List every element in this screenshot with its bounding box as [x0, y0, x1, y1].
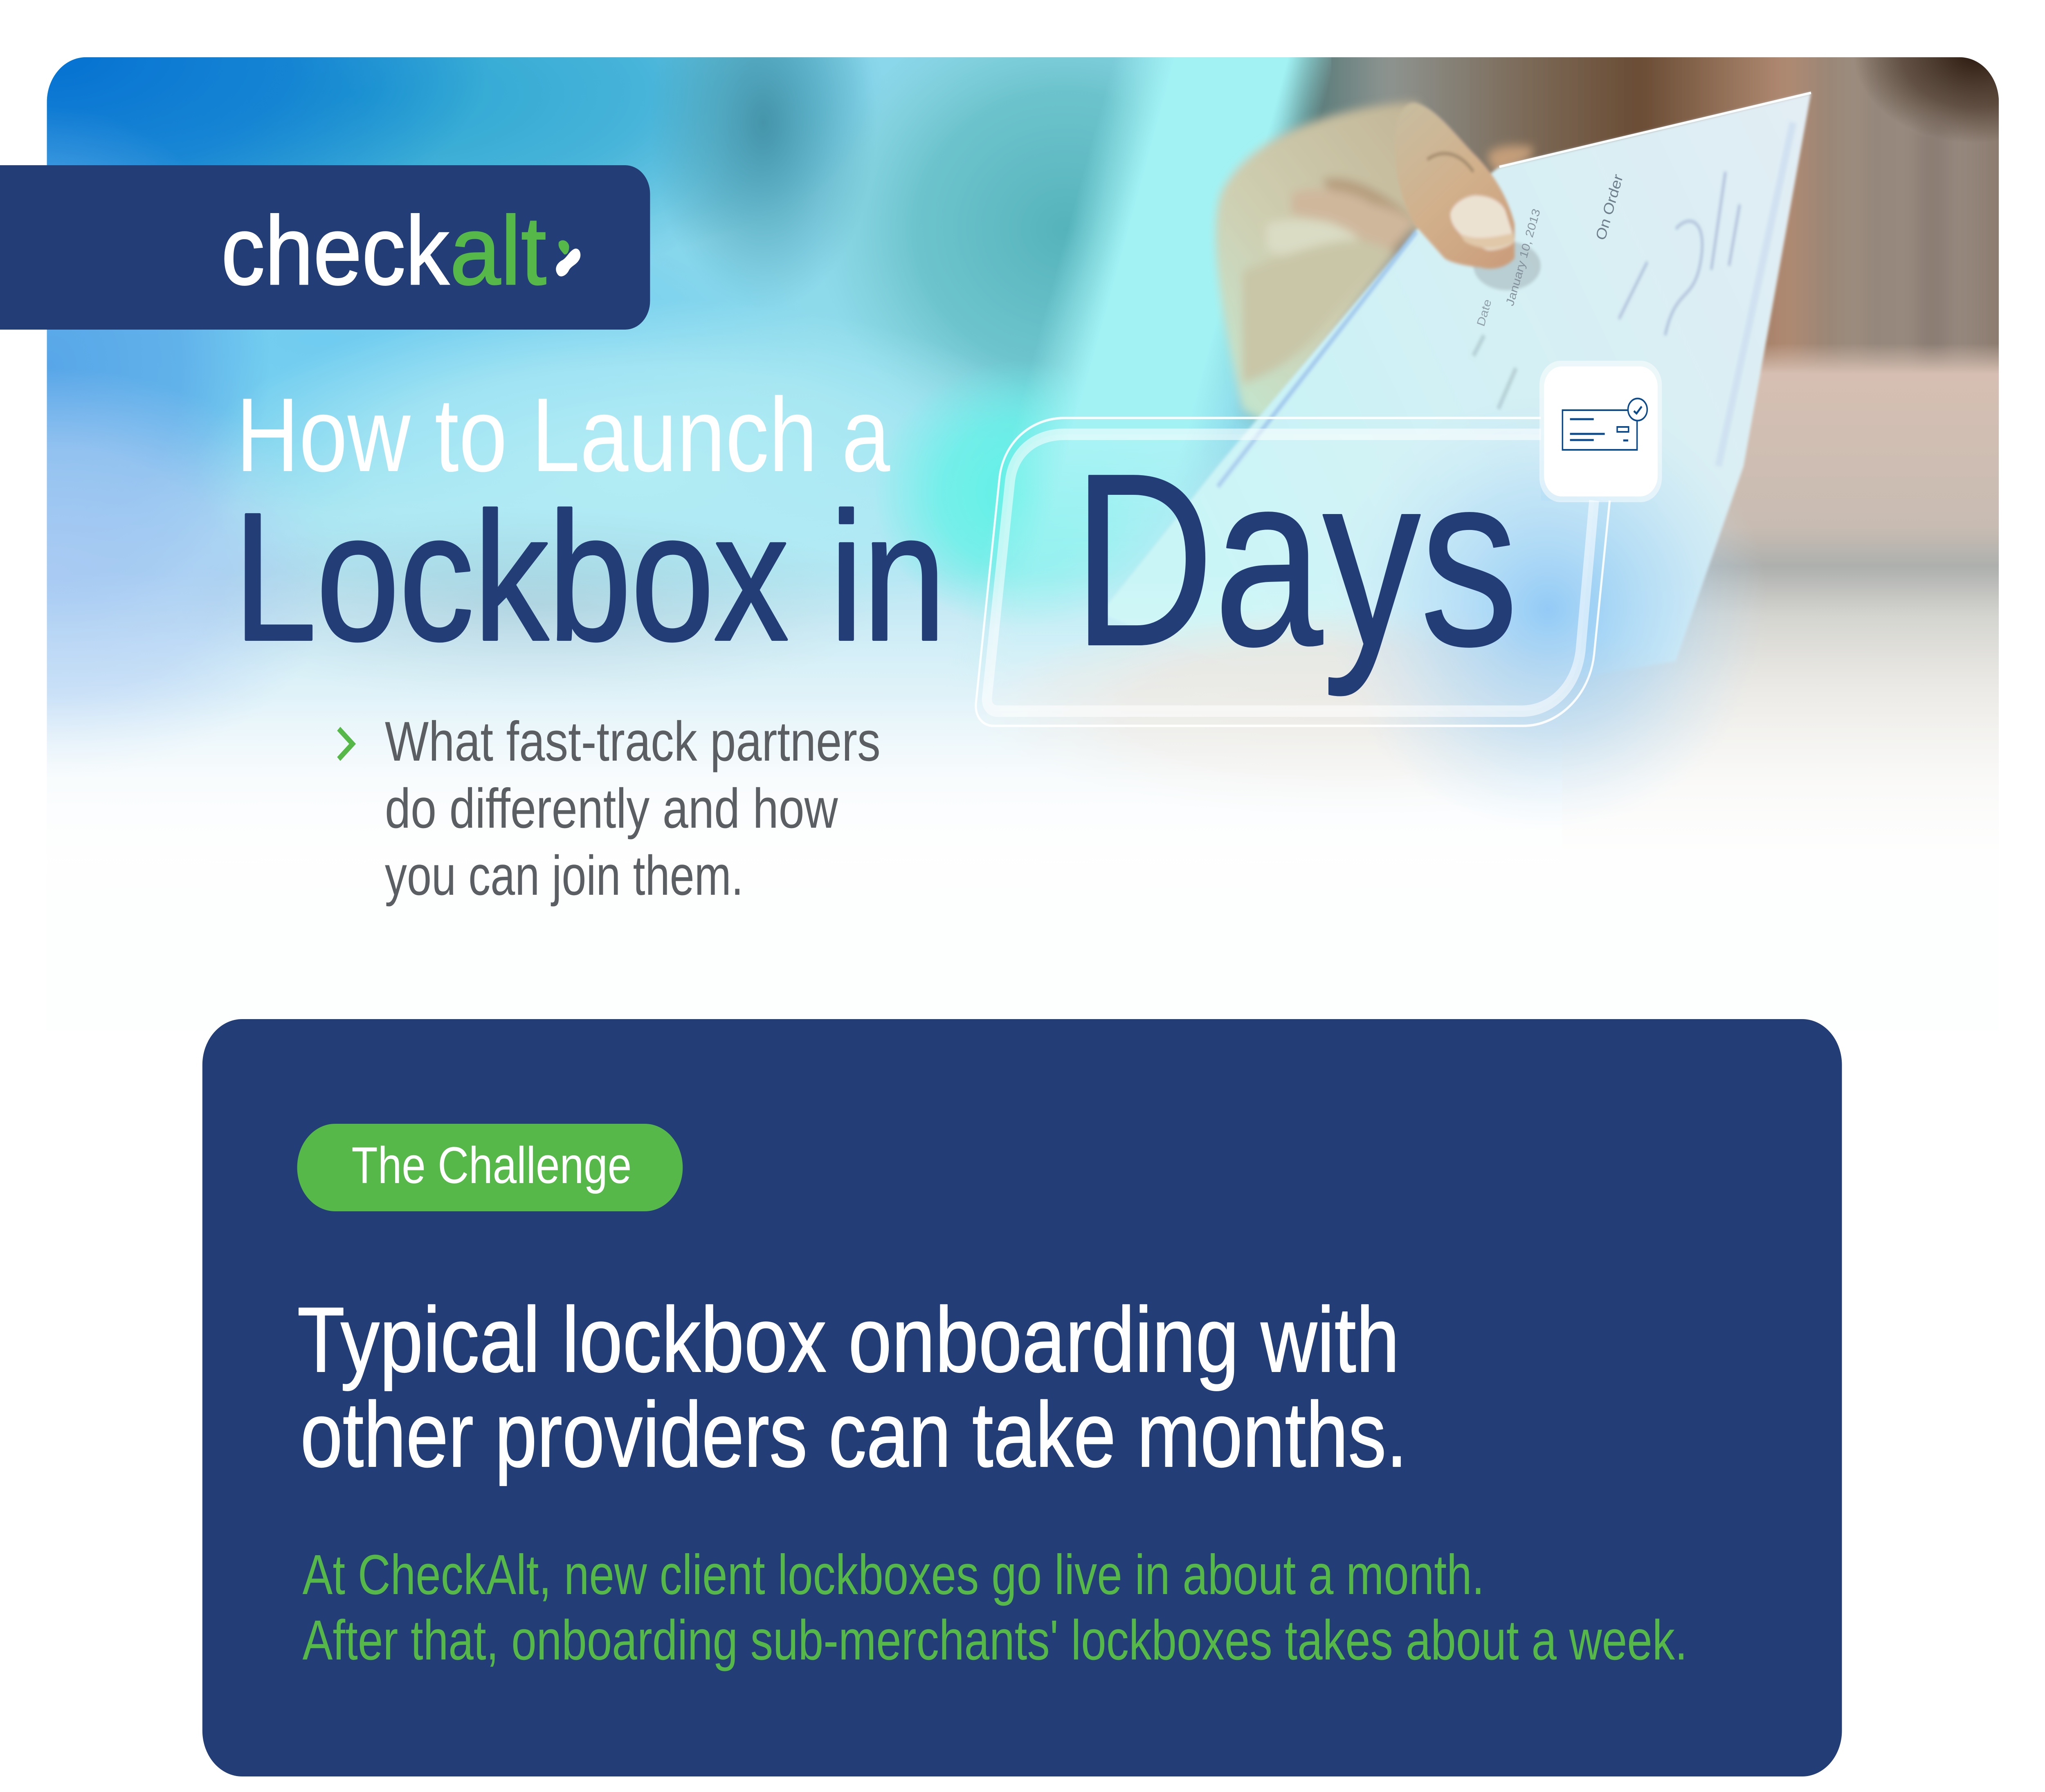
subtitle text: do differently and how — [385, 777, 838, 840]
green body text — [303, 1543, 1688, 1672]
heading: other providers can take months. — [300, 1383, 1407, 1486]
photo: blue glow — [1314, 368, 1782, 875]
logo: checkalt wordmark: check — [221, 196, 449, 305]
badge: the challenge — [297, 1124, 683, 1211]
subtitle text: you can join them. — [385, 844, 744, 907]
days word: Days — [1073, 422, 1518, 698]
subtitle text: What fast-track partners — [385, 710, 881, 773]
photo: paper top edge — [1499, 93, 1811, 167]
icon: green chevron — [339, 729, 353, 759]
photo: thumb — [1395, 103, 1515, 269]
photo: check printed text: January 10, 2013 — [1504, 207, 1543, 308]
photo: left colour wash — [47, 57, 1145, 740]
photo: hand — [1216, 102, 1533, 425]
subtitle text — [385, 710, 881, 907]
logo: symbol — [556, 240, 580, 276]
heading: Typical lockbox onboarding with — [297, 1288, 1400, 1391]
logo bar — [0, 165, 650, 330]
icon: check card — [1539, 361, 1662, 502]
photo: front table band — [959, 573, 1739, 826]
green body text: At CheckAlt, new client lockboxes go live in about a month. — [303, 1543, 1484, 1606]
panel: the challenge — [202, 1019, 1842, 1776]
days frame — [976, 418, 1610, 726]
photo: table surface — [1562, 344, 1999, 1031]
badge: the challenge: The Challenge — [351, 1137, 631, 1195]
photo: soft shadows behind title — [311, 541, 762, 662]
heading — [297, 1288, 1407, 1486]
logo bar: alt — [450, 196, 546, 305]
photo: check printed text: Date — [1475, 297, 1494, 328]
photo: blurred back wall — [1239, 57, 1999, 427]
green body text: After that, onboarding sub-merchants' lockboxes takes about a week. — [303, 1609, 1688, 1672]
photo: white fade at bottom — [47, 573, 1999, 1031]
photo: arm — [923, 57, 1331, 712]
photo: check printed text — [1475, 172, 1626, 328]
photo: dark corner — [1775, 57, 1999, 221]
photo: check printed text: On Order — [1593, 172, 1626, 243]
title line 1: How to Launch a — [236, 376, 890, 493]
photo: paper check — [1101, 93, 1811, 687]
title line 2: Lockbox in — [234, 475, 946, 678]
panel: hero photo background — [47, 57, 1999, 816]
